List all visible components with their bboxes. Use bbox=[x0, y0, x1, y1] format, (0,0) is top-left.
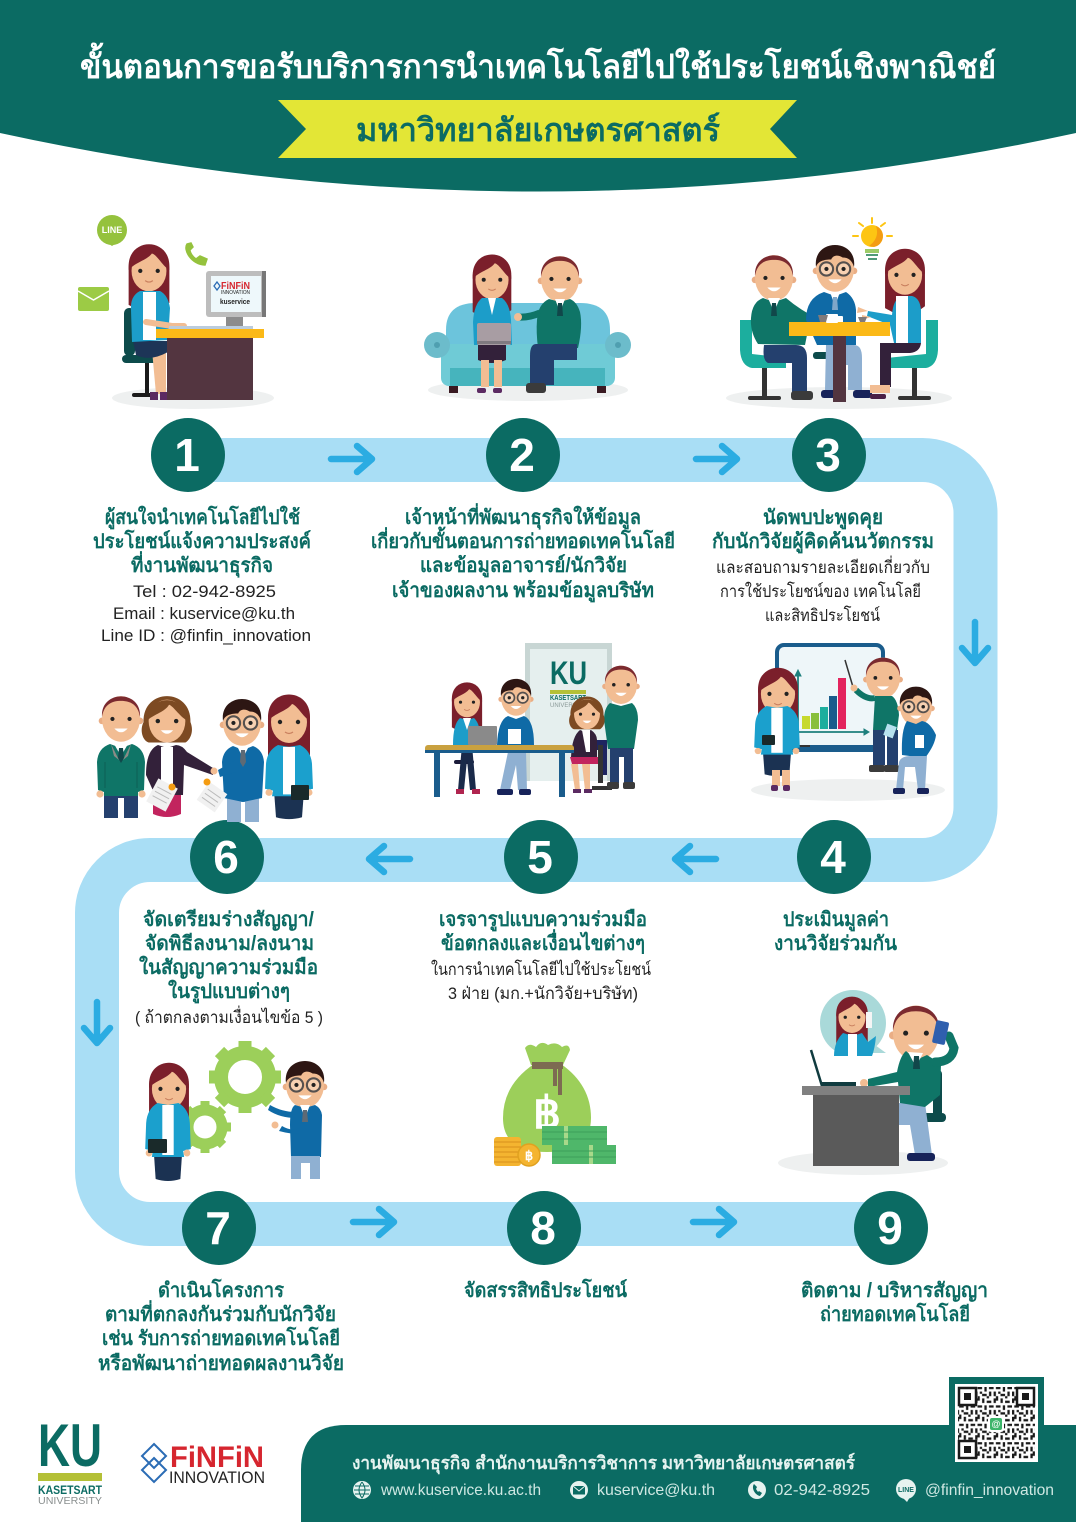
right chair bbox=[886, 320, 938, 368]
step 6 badge: 6 bbox=[213, 831, 239, 883]
step 2 text bbox=[371, 502, 675, 604]
KU logo: UNIVERSITY bbox=[38, 1495, 102, 1507]
step 8 badge bbox=[507, 1191, 581, 1265]
contact: email: kuservice@ku.th bbox=[597, 1482, 715, 1499]
banner: university name: มหาวิทยาลัยเกษตรศาสตร์ bbox=[356, 112, 720, 148]
icon: mail bbox=[78, 287, 109, 311]
FiNFiN Innovation logo: FiNFiN bbox=[170, 1441, 264, 1474]
gear large bbox=[209, 1041, 281, 1113]
step 3 text bbox=[712, 507, 934, 625]
step 9 text: ติดตาม / บริหารสัญญา bbox=[801, 1280, 988, 1302]
step 7 text: หรือพัฒนาถ่ายทอดผลงานวิจัย bbox=[98, 1352, 344, 1375]
bar chart bbox=[795, 670, 869, 735]
illustration: step 1 contact at desk bbox=[78, 215, 274, 409]
desk bbox=[802, 1086, 910, 1095]
step 4 text: งานวิจัยร่วมกัน bbox=[774, 933, 897, 955]
KU logo bbox=[38, 1412, 102, 1507]
icon: LINE bubble: LINE bbox=[102, 225, 122, 235]
arrow: 2 to 3 bbox=[696, 446, 737, 472]
man in teal bbox=[96, 744, 146, 818]
step 6 text: ในรูปแบบต่างๆ bbox=[168, 979, 290, 1005]
contact: LINE bbox=[896, 1479, 1054, 1502]
step 3 text: กับนักวิจัยผู้คิดค้นนวัตกรรม bbox=[712, 530, 934, 555]
step 3 text: การใช้ประโยชน์ของ เทคโนโลยี bbox=[720, 581, 921, 601]
step 1 text: ประโยชน์แจ้งความประสงค์ bbox=[93, 529, 311, 553]
step 6 text: จัดเตรียมร่างสัญญา/ bbox=[143, 908, 314, 931]
step 2 badge: 2 bbox=[509, 429, 535, 481]
coins: ฿ bbox=[525, 1148, 533, 1163]
document left bbox=[146, 778, 178, 812]
illustration: step 9 follow-up phone call bbox=[778, 990, 954, 1175]
KU sign: KASETSART bbox=[550, 695, 587, 702]
whiteboard bbox=[777, 645, 883, 750]
step 4 text bbox=[774, 909, 897, 955]
illustration: step 7 running project gears bbox=[145, 1041, 327, 1181]
contact: LINE: @finfin_innovation bbox=[925, 1482, 1054, 1499]
step 2 text: เกี่ยวกับขั้นตอนการถ่ายทอดเทคโนโลยี bbox=[371, 526, 675, 553]
gear small bbox=[179, 1101, 231, 1153]
table bbox=[789, 322, 890, 336]
icon: phone bbox=[186, 243, 207, 265]
step 5 badge bbox=[504, 820, 578, 894]
KU logo: KU bbox=[38, 1412, 102, 1479]
chair bbox=[906, 1113, 946, 1122]
illustration: step 6 signing agreement bbox=[96, 694, 313, 822]
illustration: step 8 money bag: ฿ bbox=[533, 1089, 561, 1138]
arrow: 1 to 2 bbox=[331, 446, 372, 472]
step 6 badge bbox=[190, 820, 264, 894]
step 2 badge bbox=[486, 418, 560, 492]
arrow: 3 to 4 bbox=[962, 622, 988, 663]
step 7 badge: 7 bbox=[205, 1202, 231, 1254]
contact: phone: 02-942-8925 bbox=[774, 1482, 870, 1499]
step 4 text: ประเมินมูลค่า bbox=[783, 909, 889, 933]
step 3 text: และสิทธิประโยชน์ bbox=[765, 605, 880, 625]
banner: university name bbox=[278, 100, 797, 158]
process path band bbox=[97, 460, 976, 1224]
step 1 badge: 1 bbox=[174, 429, 200, 481]
middle glasses man bbox=[825, 345, 862, 390]
illustration: step 2 meeting on sofa bbox=[424, 254, 631, 401]
illustration: step 8 money bag bbox=[494, 1043, 616, 1166]
step 1 text: Email : kuservice@ku.th bbox=[113, 604, 295, 623]
title: ขั้นตอนการขอรับบริการการนำเทคโนโลยีไปใช้ประโยชน์เชิงพาณิชย์ bbox=[80, 42, 996, 85]
icon: idea bulb bbox=[853, 218, 892, 260]
illustration: step 3 round table discussion bbox=[726, 218, 952, 409]
step 7 text: เช่น รับการถ่ายทอดเทคโนโลยี bbox=[102, 1326, 340, 1350]
monitor: INNOVATION bbox=[221, 290, 250, 296]
header band bbox=[0, 0, 1076, 192]
step 4 badge: 4 bbox=[820, 831, 846, 883]
step 1 text: ผู้สนใจนำเทคโนโลยีไปใช้ bbox=[105, 505, 300, 531]
step 5 text: 3 ฝ่าย (มก.+นักวิจัย+บริษัท) bbox=[448, 984, 638, 1003]
step 7 text bbox=[98, 1278, 344, 1375]
KU sign bbox=[550, 655, 587, 709]
arrow: 5 to 6 bbox=[369, 846, 410, 872]
right woman bbox=[885, 249, 925, 314]
icon: LINE bubble bbox=[97, 215, 127, 246]
center chair bbox=[813, 352, 853, 359]
document right bbox=[197, 782, 227, 812]
monitor: FiNFiN bbox=[221, 281, 250, 292]
step 5 text: เจรจารูปแบบความร่วมมือ bbox=[439, 908, 647, 933]
glasses man shaking hands bbox=[222, 746, 264, 822]
step 2 text: และข้อมูลอาจารย์/นักวิจัย bbox=[420, 554, 627, 579]
step 3 text: นัดพบปะพูดคุย bbox=[763, 507, 883, 531]
step 6 text: จัดพิธีลงนาม/ลงนาม bbox=[145, 932, 314, 955]
step 3 badge: 3 bbox=[815, 429, 841, 481]
arrow: 8 to 9 bbox=[693, 1209, 734, 1235]
caller man bbox=[898, 1103, 932, 1155]
monitor: kuservice bbox=[220, 299, 250, 306]
seated glasses man bbox=[897, 687, 935, 726]
woman with document bbox=[153, 790, 181, 817]
QR code: @ bbox=[991, 1419, 1001, 1429]
illustration: step 4 evaluation at whiteboard bbox=[751, 645, 945, 801]
KU sign: UNIVERSITY bbox=[550, 703, 586, 709]
KU logo: KASETSART bbox=[38, 1485, 102, 1497]
arrow: 7 to 8 bbox=[353, 1209, 394, 1235]
step 6 text: ในสัญญาความร่วมมือ bbox=[139, 955, 318, 979]
presenter man bbox=[863, 657, 903, 698]
step 3 badge bbox=[792, 418, 866, 492]
left man bbox=[752, 255, 796, 301]
woman with folder bbox=[268, 694, 310, 763]
banknotes bbox=[542, 1126, 616, 1164]
arrow: 6 to 7 bbox=[84, 1002, 110, 1043]
left chair bbox=[740, 320, 786, 368]
step 9 text bbox=[801, 1280, 988, 1326]
step 1 text: Tel : 02-942-8925 bbox=[133, 582, 276, 601]
QR code bbox=[949, 1377, 1044, 1467]
step 1 badge bbox=[151, 418, 225, 492]
contact: LINE: LINE bbox=[898, 1487, 914, 1494]
step 9 badge bbox=[854, 1191, 928, 1265]
step 8 text: จัดสรรสิทธิประโยชน์ bbox=[464, 1278, 627, 1302]
step 1 text bbox=[93, 505, 311, 645]
step 1 text: Line ID : @finfin_innovation bbox=[101, 626, 311, 645]
laptop bbox=[811, 1050, 856, 1086]
step 2 text: เจ้าของผลงาน พร้อมข้อมูลบริษัท bbox=[392, 579, 654, 604]
step 6 text: ( ถ้าตกลงตามเงื่อนไขข้อ 5 ) bbox=[135, 1005, 323, 1027]
footer heading: งานพัฒนาธุรกิจ สำนักงานบริการวิชาการ มหาวิทยาลัยเกษตรศาสตร์ bbox=[352, 1452, 855, 1475]
step 9 text: ถ่ายทอดเทคโนโลยี bbox=[820, 1302, 970, 1326]
step 6 text bbox=[135, 908, 323, 1027]
footer panel bbox=[301, 1425, 1076, 1522]
step 5 text: ข้อตกลงและเงื่อนไขต่างๆ bbox=[441, 928, 645, 955]
step 7 text: ดำเนินโครงการ bbox=[158, 1278, 284, 1302]
FiNFiN Innovation logo: INNOVATION bbox=[169, 1468, 265, 1487]
illustration: step 5 negotiation meeting bbox=[425, 643, 640, 797]
step 4 badge bbox=[797, 820, 871, 894]
arrow: 4 to 5 bbox=[675, 846, 716, 872]
presenter woman bbox=[758, 668, 798, 733]
step 8 badge: 8 bbox=[530, 1202, 556, 1254]
step 2 text: เจ้าหน้าที่พัฒนาธุรกิจให้ข้อมูล bbox=[405, 502, 641, 531]
contact: website: www.kuservice.ku.ac.th bbox=[380, 1482, 541, 1499]
step 3 text: และสอบถามรายละเอียดเกี่ยวกับ bbox=[716, 555, 930, 577]
FiNFiN Innovation logo bbox=[142, 1441, 265, 1487]
step 1 text: ที่งานพัฒนาธุรกิจ bbox=[131, 550, 273, 578]
speech bubble with woman bbox=[820, 990, 886, 1056]
monitor bbox=[206, 271, 266, 326]
step 5 badge: 5 bbox=[527, 831, 553, 883]
step 5 text bbox=[431, 908, 651, 1003]
step 7 badge bbox=[182, 1191, 256, 1265]
step 5 text: ในการนำเทคโนโลยีไปใช้ประโยชน์ bbox=[431, 959, 651, 979]
KU sign: KU bbox=[550, 655, 587, 691]
step 7 text: ตามที่ตกลงกันร่วมกับนักวิจัย bbox=[105, 1299, 336, 1326]
step 9 badge: 9 bbox=[877, 1202, 903, 1254]
